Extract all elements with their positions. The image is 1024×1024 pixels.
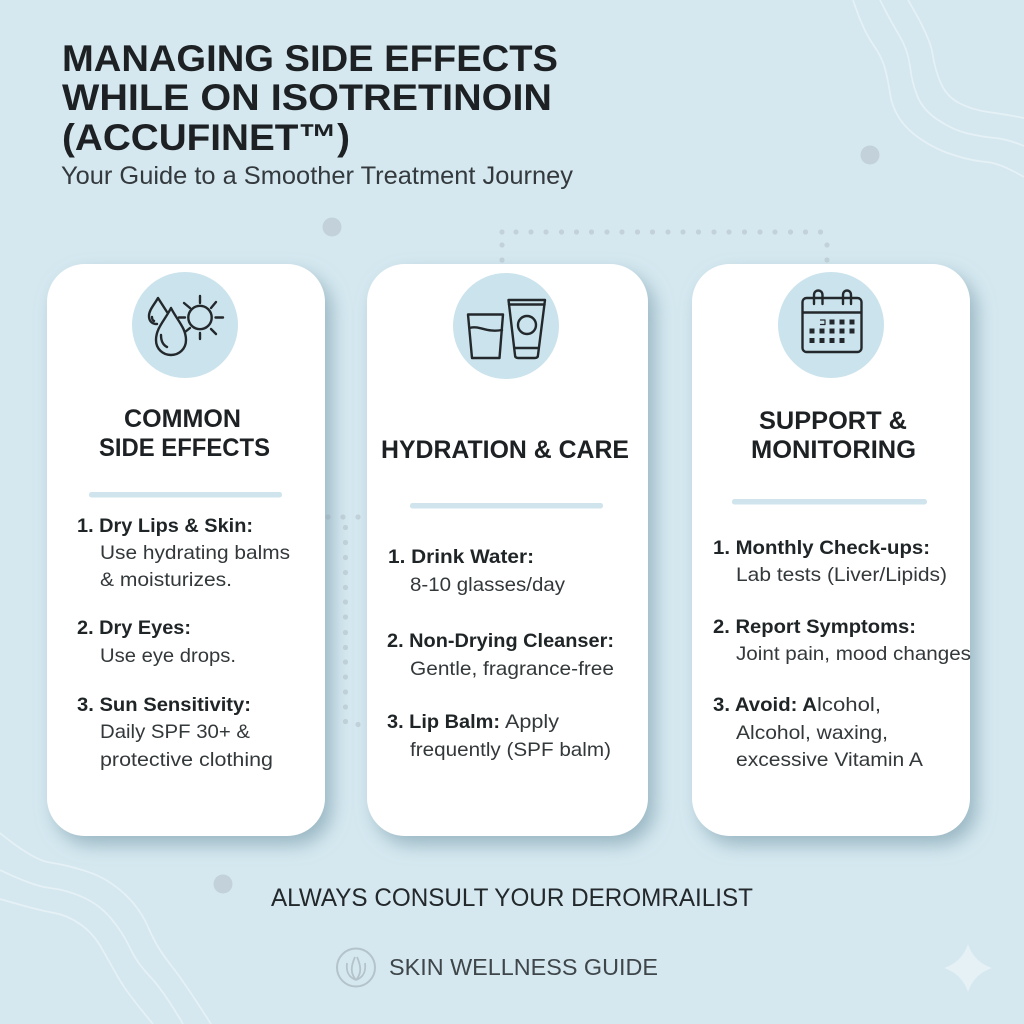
list item 1: 1. Drink Water: bbox=[388, 546, 534, 568]
list item 1: 8-10 glasses/day bbox=[410, 574, 565, 596]
background wave lines top right bbox=[853, 0, 1024, 177]
heading: MONITORING bbox=[751, 436, 916, 464]
subtitle: Your Guide to a Smoother Treatment Journey bbox=[61, 162, 574, 190]
list item 1: Lab tests (Liver/Lipids) bbox=[736, 564, 947, 586]
list item 3: frequently (SPF balm) bbox=[410, 739, 611, 761]
list item 3 bbox=[387, 711, 611, 761]
heading: SIDE EFFECTS bbox=[99, 434, 270, 462]
list item 1 bbox=[388, 546, 565, 596]
list item 2: Joint pain, mood changes bbox=[736, 643, 971, 665]
list item 3 bbox=[77, 694, 273, 771]
list item 1: & moisturizes. bbox=[100, 569, 232, 591]
list item 3: excessive Vitamin A bbox=[736, 749, 923, 771]
list item 1: Use hydrating balms bbox=[100, 542, 290, 564]
list item 3: protective clothing bbox=[100, 749, 273, 771]
brand logo and name bbox=[337, 948, 658, 986]
icon: sparkle bbox=[944, 944, 992, 992]
decorative dots bbox=[214, 146, 880, 894]
brand logo and name: SKIN WELLNESS GUIDE bbox=[389, 954, 658, 980]
list item 2: Gentle, fragrance-free bbox=[410, 658, 614, 680]
divider bbox=[732, 499, 927, 504]
list item 2 bbox=[387, 630, 614, 680]
list item 3: Apply bbox=[505, 711, 559, 733]
heading: HYDRATION & CARE bbox=[381, 436, 629, 464]
list item 1 bbox=[77, 515, 290, 591]
list item 1: 1. Dry Lips & Skin: bbox=[77, 515, 253, 537]
list item 2: 2. Non-Drying Cleanser: bbox=[387, 630, 614, 652]
title bbox=[62, 37, 558, 158]
heading bbox=[99, 405, 270, 462]
list item 1: 1. Monthly Check-ups: bbox=[713, 537, 930, 559]
title: WHILE ON ISOTRETINOIN bbox=[62, 76, 552, 118]
list item 2 bbox=[77, 617, 236, 667]
heading: SUPPORT & bbox=[759, 407, 907, 435]
list item 3: 3. Lip Balm: bbox=[387, 711, 500, 733]
list item 3: 3. Sun Sensitivity: bbox=[77, 694, 251, 716]
panel: common side effects bbox=[47, 264, 325, 836]
dotted connector top bbox=[499, 229, 830, 263]
divider bbox=[89, 492, 282, 498]
icon: calendar bbox=[778, 272, 884, 378]
list item 2: 2. Report Symptoms: bbox=[713, 616, 916, 638]
list item 3: lcohol, bbox=[817, 694, 881, 716]
panel: hydration and care bbox=[367, 264, 648, 836]
title: MANAGING SIDE EFFECTS bbox=[62, 37, 558, 79]
title: (ACCUFINET™) bbox=[62, 116, 350, 158]
icon: water glass and tube bbox=[453, 273, 559, 379]
heading: COMMON bbox=[124, 405, 241, 433]
icon: water drops and sun bbox=[132, 272, 238, 378]
divider bbox=[410, 503, 603, 508]
dotted connector left bbox=[325, 514, 361, 727]
list item 2: Use eye drops. bbox=[100, 645, 236, 667]
heading bbox=[751, 407, 916, 464]
panel: support and monitoring bbox=[692, 264, 971, 836]
list item 3: Alcohol, waxing, bbox=[736, 722, 888, 744]
list item 2 bbox=[713, 616, 971, 665]
background wave lines bottom left bbox=[0, 833, 211, 1024]
list item 3: 3. Avoid: A bbox=[713, 694, 817, 716]
list item 2: 2. Dry Eyes: bbox=[77, 617, 191, 639]
list item 3 bbox=[713, 694, 923, 771]
icon: leaf logo bbox=[337, 948, 375, 986]
list item 3: Daily SPF 30+ & bbox=[100, 721, 250, 743]
list item 1 bbox=[713, 537, 947, 586]
footer callout: ALWAYS CONSULT YOUR DEROMRAILIST bbox=[271, 884, 753, 912]
